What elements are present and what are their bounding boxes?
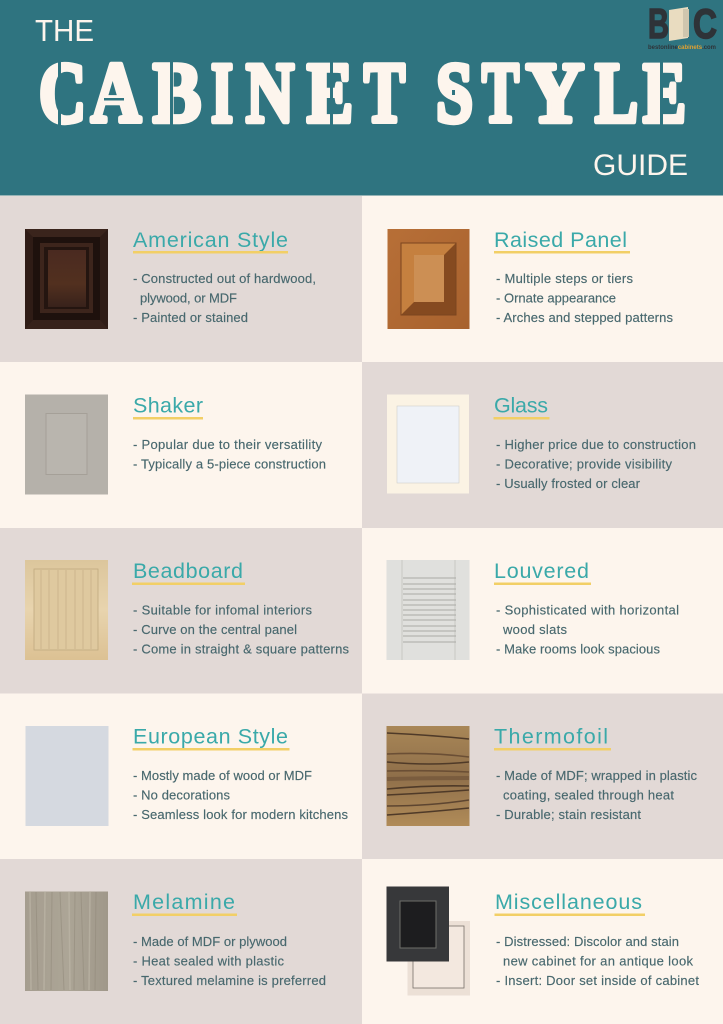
icon: raised panel wood door — [388, 229, 470, 329]
title: GUIDE: GUIDE — [593, 149, 688, 182]
panel: European Style — [0, 694, 362, 859]
bullet list: - Higher price due to construction — [496, 437, 696, 452]
title: CABINET STYLE: N — [246, 44, 294, 140]
bullet list — [496, 437, 696, 491]
bullet list — [133, 768, 348, 822]
title: CABINET STYLE: L — [595, 44, 638, 140]
bullet list: - Curve on the central panel — [133, 622, 297, 637]
title: CABINET STYLE: E — [643, 44, 686, 140]
heading: Beadboard — [133, 559, 243, 583]
bullet list: - Come in straight & square patterns — [133, 642, 350, 656]
heading: Melamine — [133, 890, 235, 914]
bullet list: - Suitable for infomal interiors — [133, 602, 312, 618]
bullet list: - Textured melamine is preferred — [133, 973, 326, 988]
icon: distressed and inset doors — [386, 886, 470, 996]
logo: BOC best online cabinets: C — [693, 0, 717, 47]
bullet list — [496, 602, 679, 656]
bullet list: - Make rooms look spacious — [496, 642, 660, 656]
bullet list: - Constructed out of hardwood, — [133, 271, 316, 286]
bullet list — [133, 271, 316, 325]
bullet list: - Heat sealed with plastic — [133, 954, 284, 968]
icon: grey shaker door — [25, 394, 108, 494]
title: CABINET STYLE — [39, 44, 686, 140]
bullet list: - Distressed: Discolor and stain — [496, 934, 679, 949]
heading: European Style — [133, 724, 288, 748]
bullet list — [496, 271, 674, 325]
panel: Melamine — [0, 859, 362, 1024]
title: CABINET STYLE: A — [91, 44, 141, 140]
bullet list — [496, 934, 699, 988]
icon: flat European door — [26, 726, 108, 826]
bullet list: new cabinet for an antique look — [503, 954, 694, 968]
title: CABINET STYLE: I — [211, 44, 233, 140]
bullet list: coating, sealed through heat — [503, 788, 674, 802]
icon: wood grain thermofoil door — [386, 726, 470, 826]
heading: Miscellaneous — [495, 890, 642, 914]
logo: BOC best online cabinets: B — [648, 0, 669, 47]
heading: American Style — [133, 228, 288, 252]
bullet list: - No decorations — [133, 788, 230, 802]
bullet list: - Typically a 5-piece construction — [133, 456, 326, 472]
heading: Thermofoil — [494, 724, 608, 748]
panel: Thermofoil — [362, 694, 723, 859]
icon: glass door — [387, 394, 469, 494]
logo: BOC best online cabinets — [648, 0, 717, 51]
heading: Shaker — [133, 394, 203, 418]
bullet list: - Decorative; provide visibility — [496, 456, 672, 472]
title: CABINET STYLE: C — [39, 44, 86, 140]
panel: Glass — [362, 362, 723, 528]
bullet list — [133, 934, 326, 988]
bullet list — [133, 602, 350, 656]
bullet list — [133, 437, 326, 472]
heading: Raised Panel — [494, 228, 627, 252]
bullet list: - Ornate appearance — [496, 290, 616, 306]
title: CABINET STYLE: S — [436, 44, 473, 140]
header banner — [0, 0, 723, 196]
bullet list: wood slats — [502, 622, 568, 637]
panel: Shaker — [0, 362, 362, 528]
title: CABINET STYLE: Y — [526, 44, 584, 140]
bullet list: - Usually frosted or clear — [496, 476, 641, 491]
logo: BOC best online cabinets: bestonlinecabinets.com — [648, 44, 716, 51]
icon: dark wood raised door — [25, 229, 108, 329]
bullet list: - Arches and stepped patterns — [496, 310, 674, 325]
panel: Beadboard — [0, 528, 362, 694]
bullet list: - Popular due to their versatility — [133, 437, 322, 452]
bullet list: - Durable; stain resistant — [496, 807, 641, 822]
title: CABINET STYLE: T — [482, 44, 519, 140]
bullet list: - Made of MDF or plywood — [133, 934, 287, 949]
title: CABINET STYLE: B — [153, 44, 201, 140]
icon: melamine textured door — [25, 892, 108, 991]
heading: Glass — [494, 394, 548, 418]
bullet list: plywood, or MDF — [140, 290, 237, 306]
bullet list — [496, 768, 698, 822]
panel: Raised Panel — [362, 196, 723, 362]
panel: Miscellaneous — [362, 859, 723, 1024]
title: CABINET STYLE: T — [364, 44, 405, 140]
panel: Louvered — [362, 528, 723, 694]
title: CABINET STYLE: E — [307, 44, 353, 140]
title: THE: THE — [35, 13, 94, 48]
bullet list: - Made of MDF; wrapped in plastic — [496, 768, 698, 783]
icon: beadboard door — [25, 560, 108, 660]
bullet list: - Painted or stained — [133, 310, 248, 325]
heading: Louvered — [494, 559, 589, 583]
bullet list: - Multiple steps or tiers — [496, 271, 634, 286]
bullet list: - Sophisticated with horizontal — [496, 602, 679, 618]
bullet list: - Seamless look for modern kitchens — [133, 807, 348, 822]
panel: American Style — [0, 196, 362, 362]
bullet list: - Mostly made of wood or MDF — [133, 768, 312, 783]
icon: louvered door — [386, 560, 470, 660]
bullet list: - Insert: Door set inside of cabinet — [496, 973, 699, 988]
